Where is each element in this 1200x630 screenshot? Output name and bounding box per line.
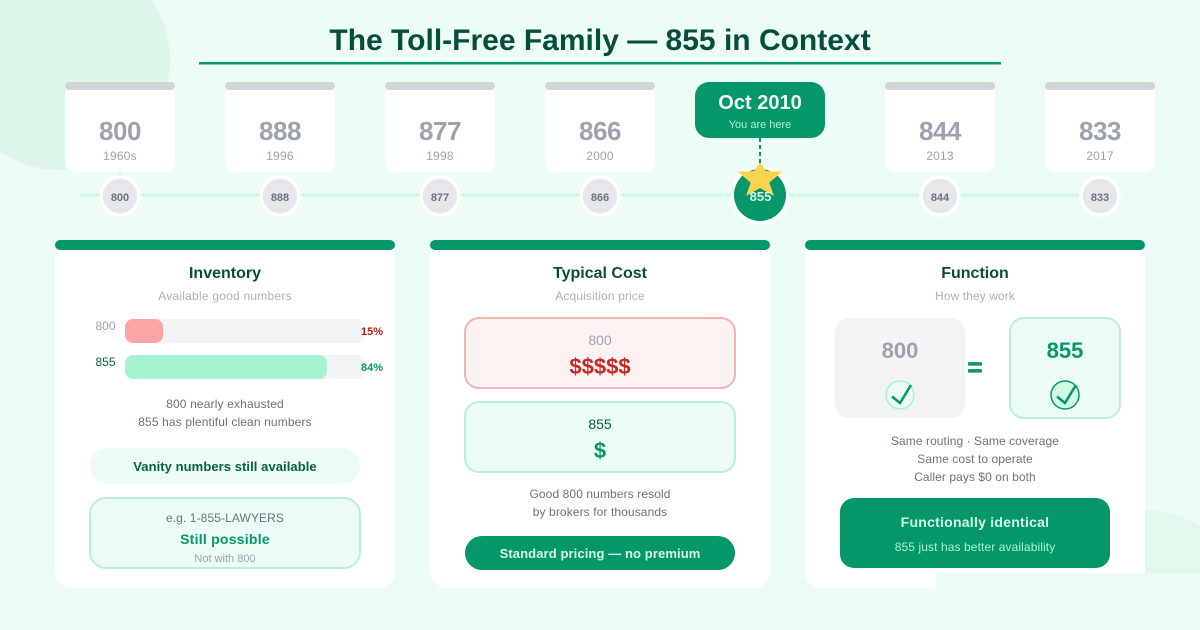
callout: functionally identical: 855 just has better availability [895,540,1055,554]
node: 833: 833 [1091,192,1109,204]
subtitle: typical cost: Acquisition price [555,289,645,303]
timeline axis [80,194,1120,196]
note: function: Same routing · Same coverage [891,434,1059,448]
bar: 855 [95,355,383,379]
box: still possible [90,498,360,568]
node: 844: 844 [931,192,950,204]
timeline card: 888 [225,82,335,172]
panel: function [805,240,1145,588]
connector: callout to node [759,138,761,165]
callout: Oct 2010: Oct 2010 [718,92,802,114]
panel: function: Caller pays $0 on both [914,470,1036,484]
timeline card: 844: 2013 [926,149,954,163]
box: 855 price: 855 [588,416,612,432]
timeline card: 866: 866 [579,116,621,146]
bar: 800 [95,319,383,343]
timeline card: 833: 2017 [1086,149,1114,163]
bar: 855: 855 [95,355,116,369]
box: 855 [1010,318,1120,418]
timeline card: 800: 1960s [103,149,137,163]
box: 800: 800 [882,338,918,363]
callout: Oct 2010: You are here [729,119,791,131]
node: 888 [261,177,299,215]
callout: functionally identical: Functionally identical [901,514,1049,530]
timeline card: 833: 833 [1079,116,1121,146]
heading: typical cost: Typical Cost [553,265,648,282]
box: 800 price: $$$$$ [569,354,631,379]
box: still possible: Not with 800 [194,553,256,565]
node: 844 [921,177,959,215]
label: 855: 855 [750,189,771,204]
icon: star [738,162,782,196]
timeline card: 888: 888 [259,116,301,146]
equals sign: = [967,352,983,382]
box: still possible: Still possible [180,531,270,547]
panel: inventory: 855 has plentiful clean numbers [138,415,312,429]
node: 800 [101,172,139,215]
panel: inventory [55,240,395,588]
timeline card: 877: 877 [419,116,461,146]
callout: functionally identical [840,498,1110,568]
note: inventory: 800 nearly exhausted [166,397,284,411]
pill: vanity numbers: Vanity numbers still available [133,459,317,474]
node: 888: 888 [271,192,289,204]
box: still possible: e.g. 1-855-LAWYERS [166,511,284,525]
box: 855: 855 [1047,338,1083,363]
heading: function: Function [941,265,1009,282]
pill: standard pricing: Standard pricing — no premium [500,546,700,561]
bar: 800: 15% [361,326,383,338]
timeline card: 800: 800 [99,116,141,146]
timeline card: 844: 844 [919,116,962,146]
panel: function: Same cost to operate [917,452,1033,466]
pill: vanity numbers [90,448,360,484]
timeline card: 800 [65,82,175,172]
heading: inventory: Inventory [189,265,261,282]
note: typical cost: Good 800 numbers resold [529,487,671,501]
timeline card: 833 [1045,82,1155,172]
pill: standard pricing [465,536,735,570]
timeline card: 877 [385,82,495,172]
box: 800 [835,318,965,418]
node: 877: 877 [431,192,449,204]
node: 800: 800 [111,192,129,204]
timeline card: 866 [545,82,655,172]
node: 833 [1081,177,1119,215]
timeline card: 844 [885,82,995,172]
node: 866 [581,177,619,215]
bar: 800: 800 [95,319,116,333]
node: 855 current [730,166,790,224]
node: 866: 866 [591,192,609,204]
box: 855 price: $ [594,438,606,463]
timeline card: 866: 2000 [586,149,614,163]
title: The Toll-Free Family — 855 in Context [329,24,871,57]
subtitle: function: How they work [935,289,1016,303]
box: 800 price [465,318,735,388]
timeline card: 877: 1998 [426,149,454,163]
callout: Oct 2010 [695,82,825,138]
subtitle: inventory: Available good numbers [158,289,292,303]
timeline card: 888: 1996 [266,149,294,163]
node: 877 [421,177,459,215]
panel: typical cost: by brokers for thousands [533,505,667,519]
box: 800 price: 800 [588,332,612,348]
box: 855 price [465,402,735,472]
panel: typical cost [430,240,770,588]
bar: 855: 84% [361,362,383,374]
